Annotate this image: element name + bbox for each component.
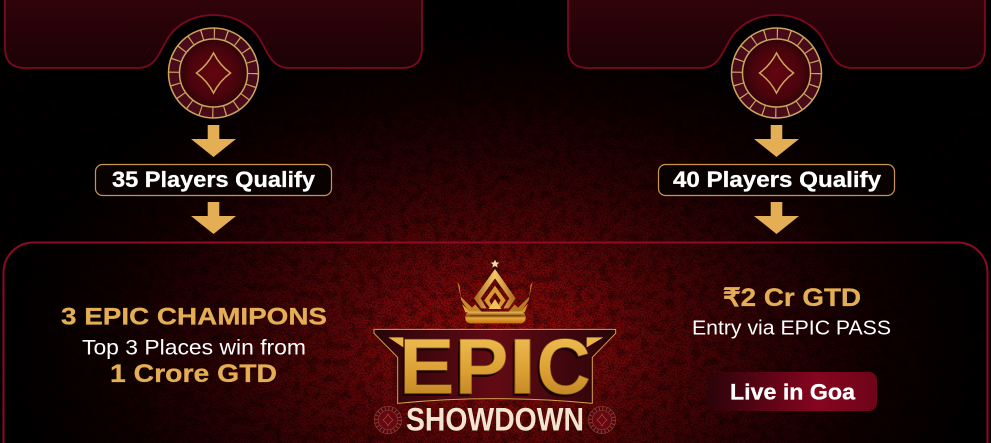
panel: main bottom card (4, 242, 988, 443)
panel: top left card (5, 0, 422, 68)
text block: champions: 1 Crore GTD (110, 360, 277, 388)
icon: right poker chip (732, 28, 822, 118)
label: 40 players qualify: 40 Players Qualify (673, 167, 882, 192)
label: 40 players qualify (658, 164, 894, 196)
arrow: right upper (754, 125, 799, 157)
epic wordmark (388, 322, 603, 413)
epic wordmark: E (397, 325, 453, 413)
epic wordmark: P (453, 325, 507, 413)
epic wordmark: C (536, 322, 591, 410)
epic wordmark: P (455, 322, 509, 410)
text block: champions: Top 3 Places win from (82, 336, 306, 360)
epic wordmark: E (399, 322, 455, 410)
arrow: right lower (754, 202, 799, 234)
icon: left poker chip (168, 28, 258, 118)
label: 35 players qualify (96, 164, 332, 196)
showdown wordmark: SHOWDOWN (406, 402, 584, 438)
text block: champions: 3 EPIC CHAMIPONS (61, 304, 327, 330)
text block: prize and entry (692, 284, 891, 340)
epic wordmark: I (508, 322, 537, 410)
button: live in goa (708, 372, 877, 411)
text block: prize and entry: ₹2 Cr GTD (723, 284, 861, 312)
icon: crown (457, 260, 533, 323)
banner (374, 329, 616, 403)
icon: small left chip (374, 406, 402, 434)
arrow: left lower (191, 202, 236, 234)
panel: top right card (568, 0, 985, 68)
text block: champions (61, 304, 327, 388)
button: live in goa: Live in Goa (730, 380, 856, 404)
epic wordmark: I (506, 325, 535, 413)
epic wordmark: C (534, 325, 589, 413)
label: 35 players qualify: 35 Players Qualify (112, 167, 316, 192)
arrow: left upper (191, 125, 236, 157)
icon: small right chip (588, 406, 616, 434)
logo: epic showdown (374, 260, 616, 438)
text block: prize and entry: Entry via EPIC PASS (692, 318, 891, 340)
